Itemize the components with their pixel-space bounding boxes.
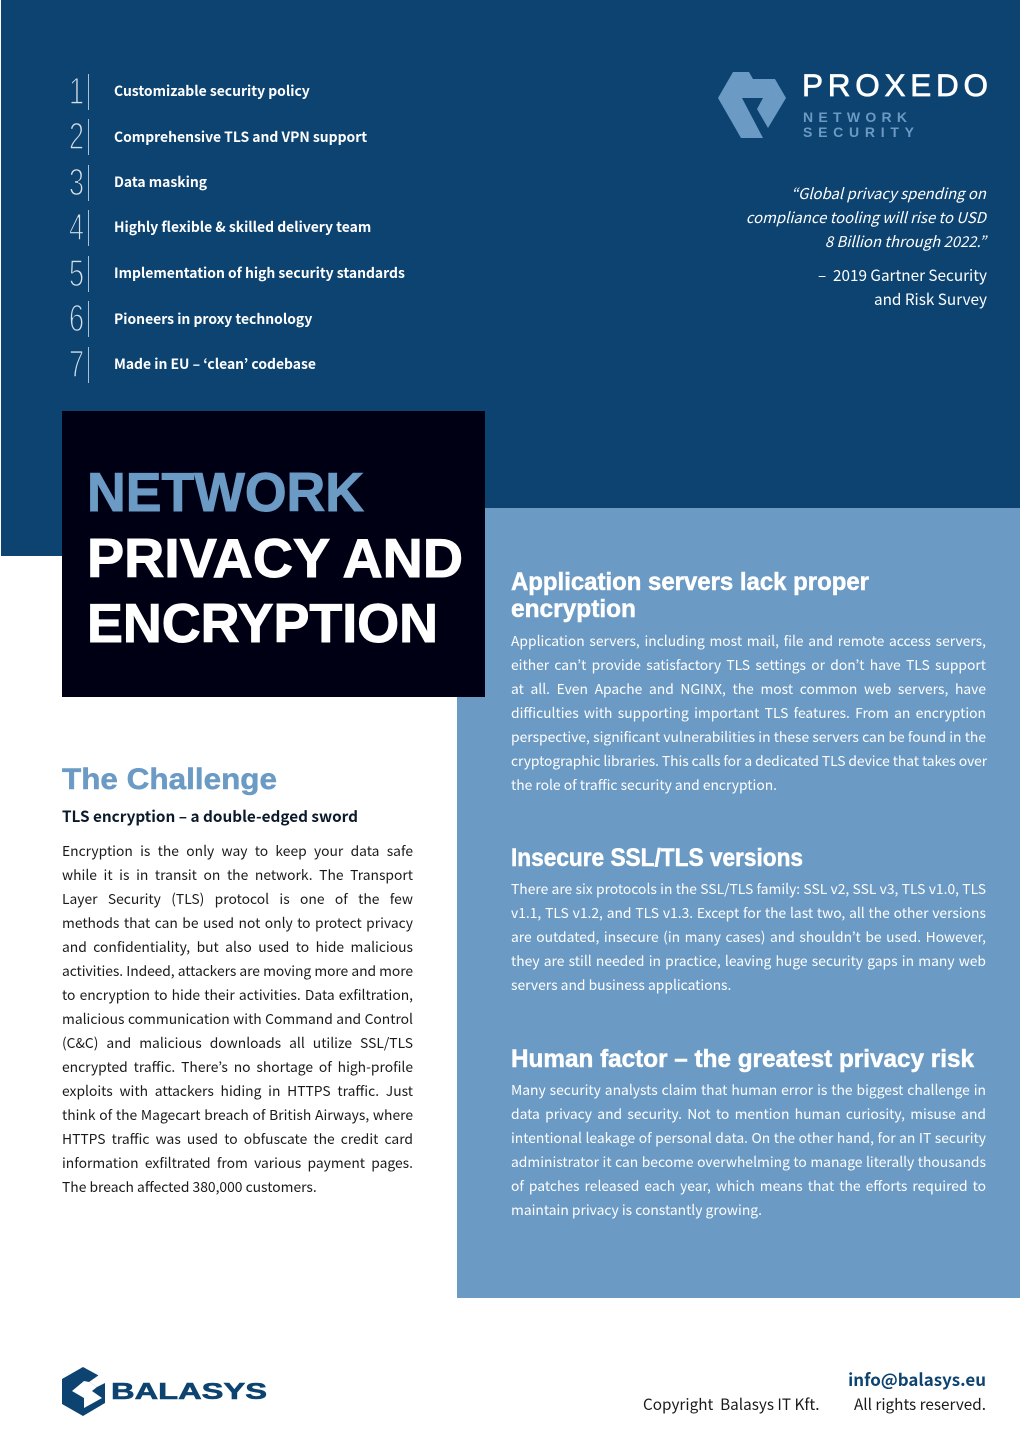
title line 2: PRIVACY AND [87,527,463,589]
item 6 [69,298,312,340]
human factor text: data privacy and security. Not to mention human curiosity, misuse and [511,1103,986,1123]
quote: compliance tooling will rise to USD [746,207,986,228]
insecure versions text: v1.1, TLS v1.2, and TLS v1.3. Except for the last two, all the other versions [511,902,986,922]
item 2 [69,116,367,158]
item 1 [69,71,310,113]
application servers text: difficulties with supporting important TLS features. From an encryption [511,702,986,722]
challenge body text: think of the Magecart breach of British Airways, where [62,1104,413,1124]
logo: Balasys [62,1367,267,1416]
application servers text: cryptographic libraries. This calls for a dedicated TLS device that takes over [511,750,987,770]
application servers text: perspective, significant vulnerabilities in these servers can be found in the [511,726,986,746]
application servers text: the role of traffic security and encryption. [511,774,777,794]
quote [746,183,988,252]
challenge body text: to encryption to hide their activities. Data exfiltration, [62,984,413,1004]
heading: application servers [511,568,869,623]
item 3 [69,162,207,204]
item 1: 1 [69,71,84,113]
Balasys wordmark: BALASYS [111,1378,267,1404]
numbered feature list [69,71,405,386]
logo: Proxedo Network Security [718,67,988,140]
heading: application servers: encryption [511,595,636,623]
challenge body text [62,840,413,1196]
challenge body text: and confidentiality, but also used to hide malicious [62,936,413,956]
footer email: info@balasys.eu [848,1366,986,1391]
title line 1: NETWORK [87,461,364,523]
item 4: Highly flexible & skilled delivery team [114,217,371,237]
challenge body text: The breach affected 380,000 customers. [62,1176,317,1196]
heading: application servers: Application servers lack proper [511,568,869,596]
challenge body text: malicious communication with Command and Control [62,1008,413,1028]
challenge body text: methods that can be used not only to protect privacy [62,912,413,932]
Network tagline: NETWORK [803,109,907,125]
item 2: 2 [69,116,84,158]
item 7: 7 [69,344,84,386]
item 5: Implementation of high security standards [114,263,405,283]
human factor text: administrator it can become overwhelming to manage literally thousands [511,1151,986,1171]
Proxedo wordmark: PROXEDO [802,67,988,103]
challenge body text: (C&C) and malicious downloads all utilize SSL/TLS [62,1032,413,1052]
insecure versions text: are outdated, insecure (in many cases) and shouldn’t be used. However, [511,926,986,946]
application servers text [511,630,988,794]
challenge body text: while it is in transit on the network. The Transport [62,864,413,884]
quote: 8 Billion through 2022.” [825,231,986,252]
subheading: TLS encryption – a double-edged sword [62,805,358,827]
heading: The Challenge: The Challenge [62,763,277,796]
challenge body text: Layer Security (TLS) protocol is one of the few [62,888,413,908]
human factor text [511,1079,986,1219]
insecure versions text: There are six protocols in the SSL/TLS family: SSL v2, SSL v3, TLS v1.0, TLS [511,878,986,898]
application servers text: Application servers, including most mail, file and remote access servers, [511,630,986,650]
quote attribution: – 2019 Gartner Security and Risk Survey [818,264,987,310]
icon: Balasys hexagon [62,1367,107,1416]
application servers text: either can’t provide satisfactory TLS settings or don’t have TLS support [511,654,986,674]
human factor text: of patches released each year, which means that the efforts required to [511,1175,986,1195]
human factor text: intentional leakage of personal data. On the other hand, for an IT security [511,1127,986,1147]
item 4: 4 [69,207,84,249]
title line 3: ENCRYPTION [87,592,438,654]
challenge body text: encrypted traffic. There’s no shortage of high-profile [62,1056,413,1076]
item 3: Data masking [114,172,207,192]
item 6: Pioneers in proxy technology [114,309,312,329]
challenge body text: Encryption is the only way to keep your data safe [62,840,413,860]
title block [62,411,485,697]
insecure versions text: they are still needed in practice, leaving huge security gaps in many web [511,950,986,970]
item 3: 3 [69,162,84,204]
footer rights: All rights reserved. [854,1393,986,1415]
item 7: Made in EU – ‘clean’ codebase [114,354,316,374]
item 7 [69,344,316,386]
challenge body text: information exfiltrated from various payment pages. [62,1152,413,1172]
item 5: 5 [69,253,84,295]
human factor text: maintain privacy is constantly growing. [511,1199,762,1219]
insecure versions text: servers and business applications. [511,974,731,994]
item 4 [69,207,371,249]
footer copyright: Copyright Balasys IT Kft. [643,1393,819,1415]
challenge body text: exploits with attackers hiding in HTTPS traffic. Just [62,1080,413,1100]
item 1: Customizable security policy [114,81,310,101]
Security tagline: SECURITY [803,124,915,140]
background: top dark blue panel [1,0,1020,556]
human factor text: Many security analysts claim that human error is the biggest challenge in [511,1079,986,1099]
challenge body text: HTTPS traffic was used to obfuscate the credit card [62,1128,413,1148]
item 6: 6 [69,298,84,340]
heading: insecure versions: Insecure SSL/TLS versions [511,844,803,872]
insecure versions text [511,878,986,994]
challenge body text: activities. Indeed, attackers are moving more and more [62,960,413,980]
quote: “Global privacy spending on [791,183,986,204]
heading: human factor: Human factor – the greatest privacy risk [511,1045,974,1073]
item 5 [69,253,405,295]
icon: Proxedo mark [718,72,786,138]
item 2: Comprehensive TLS and VPN support [114,127,367,147]
application servers text: at all. Even Apache and NGINX, the most common web servers, have [511,678,986,698]
